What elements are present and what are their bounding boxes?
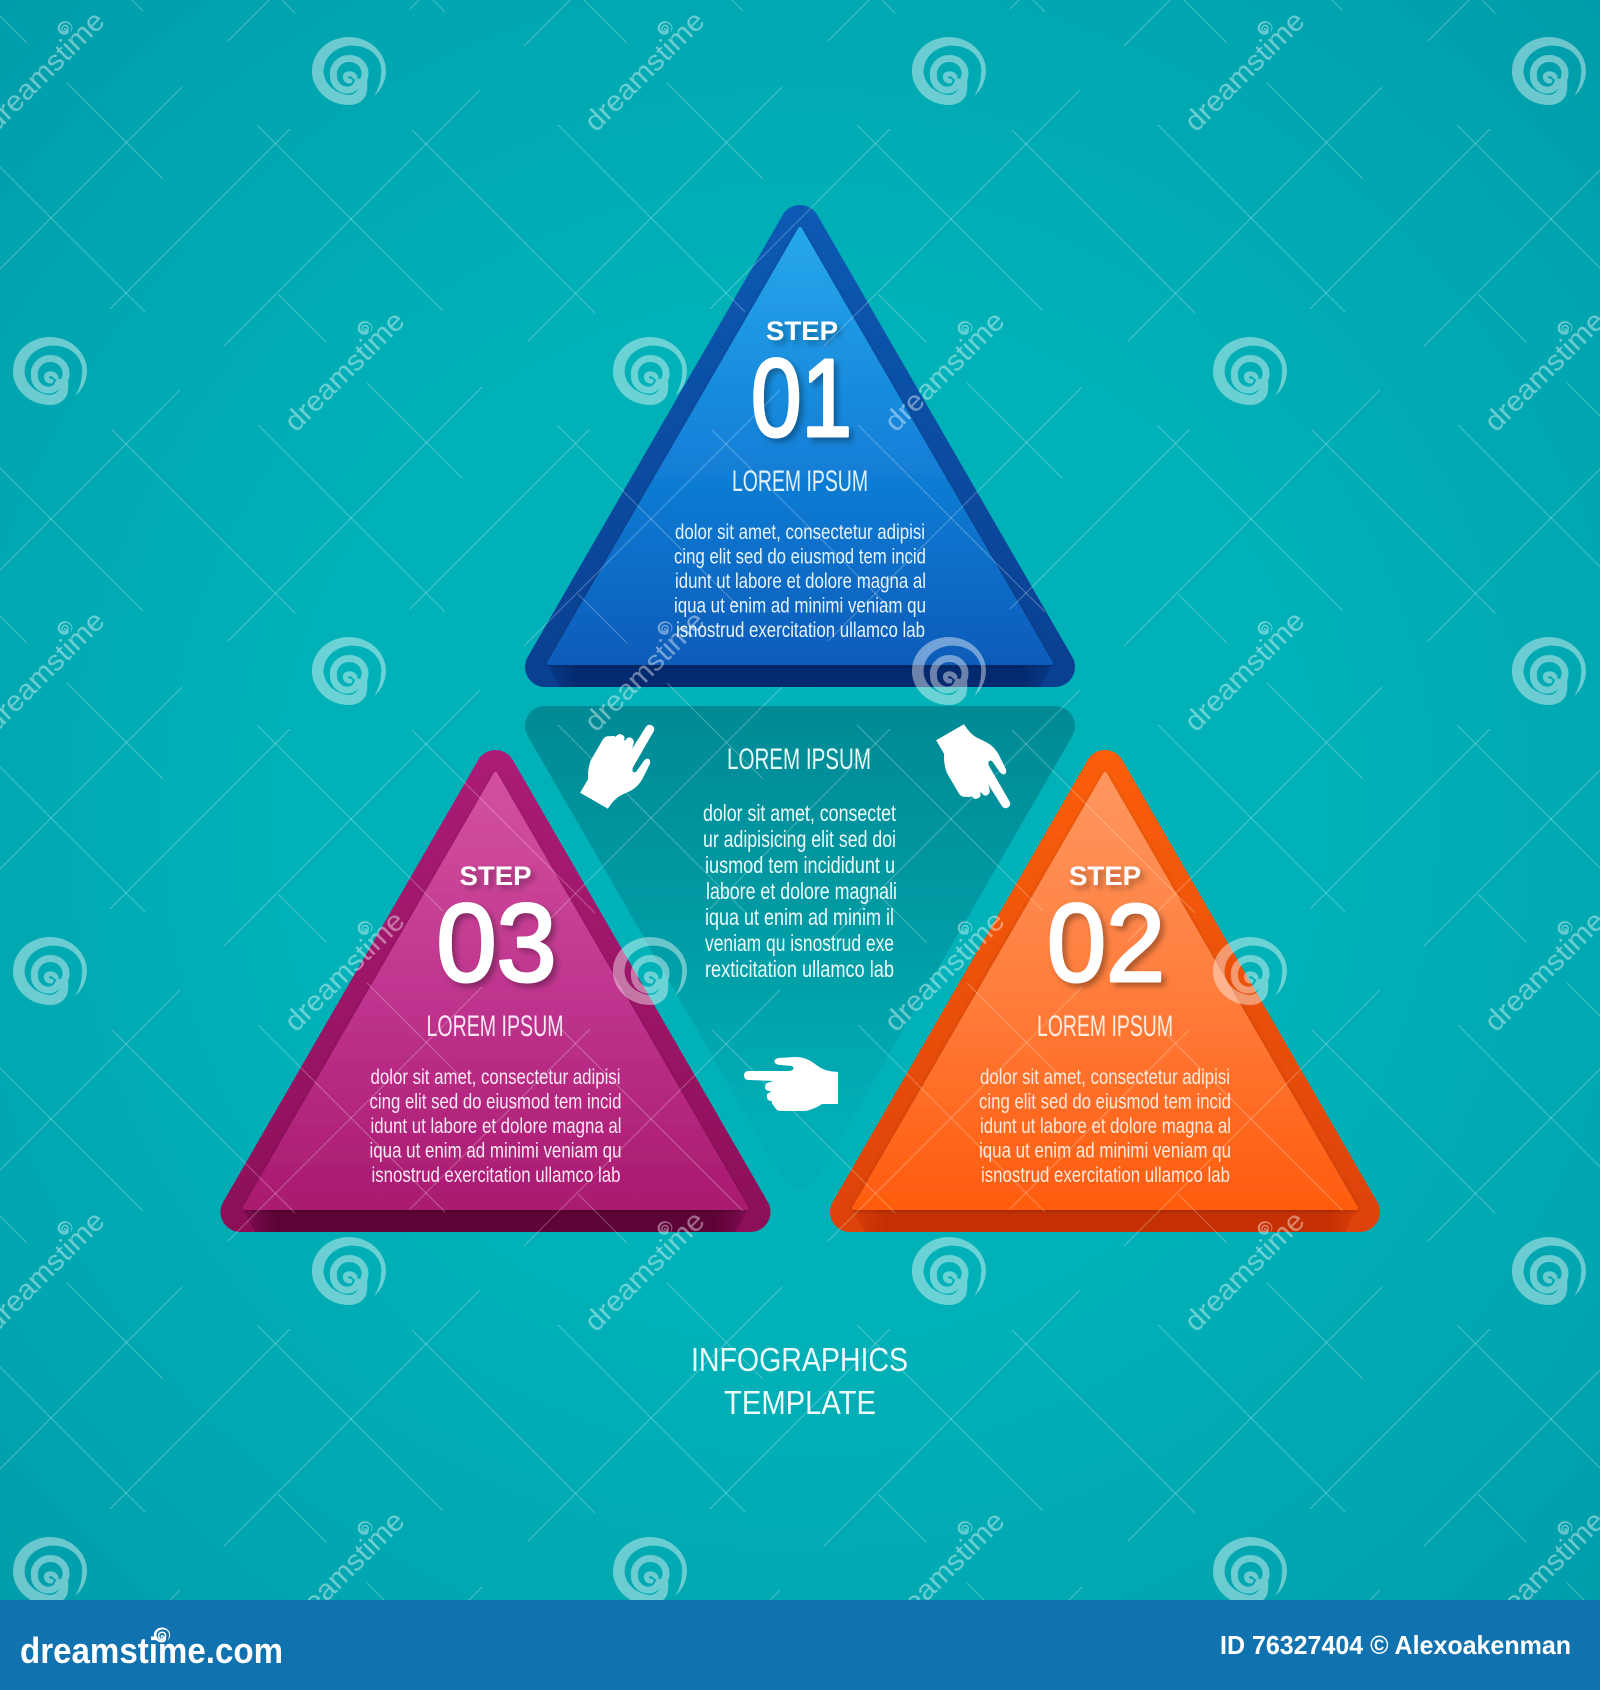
watermark overlay: dreamstime: [1178, 5, 1311, 138]
footer logo text: dreamstime.com: [20, 1630, 283, 1671]
step label: STEP: [766, 316, 838, 346]
body text: dolor sit amet, consectetur adipisi: [980, 1065, 1230, 1089]
panel: step 01 blue triangle: [545, 225, 1055, 687]
panel: step 02 orange triangle: [850, 770, 1360, 1232]
centre body text: [703, 800, 897, 982]
panel: centre inverted triangle: [545, 726, 1055, 1168]
watermark overlay: dreamstime: [578, 5, 711, 138]
title: infographics template: TEMPLATE: [724, 1384, 876, 1421]
centre body text: dolor sit amet, consectet: [703, 800, 896, 826]
body text: iqua ut enim ad minimi veniam qu: [370, 1138, 622, 1162]
panel: step 03 purple triangle: [240, 770, 750, 1232]
watermark overlay: dreamstime: [878, 305, 1011, 438]
title: infographics template: [691, 1341, 908, 1421]
step label: STEP: [1069, 861, 1141, 891]
body text: cing elit sed do eiusmod tem incid: [979, 1090, 1231, 1114]
heading: LOREM IPSUM: [1037, 1010, 1173, 1043]
footer image id: ID 76327404 © Alexoakenman: [1220, 1630, 1571, 1660]
watermark overlay: dreamstime: [878, 1505, 1011, 1638]
body text: idunt ut labore et dolore magna al: [370, 1114, 622, 1138]
heading: LOREM IPSUM: [732, 465, 868, 498]
step number: 03: [436, 882, 556, 1005]
watermark overlay: dreamstime: [1178, 1205, 1311, 1338]
watermark overlay: dreamstime: [278, 305, 411, 438]
icon: pointing hand, bottom: [744, 1057, 838, 1111]
step number: 02: [1047, 882, 1165, 1005]
body text: iqua ut enim ad minimi veniam qu: [979, 1138, 1231, 1162]
title: infographics template: INFOGRAPHICS: [691, 1341, 908, 1378]
body text: idunt ut labore et dolore magna al: [980, 1114, 1231, 1138]
body text: isnostrud exercitation ullamco lab: [676, 618, 925, 642]
icon: pointing hand, top right: [930, 717, 1024, 825]
body text: [979, 1065, 1231, 1187]
watermark overlay: dreamstime: [878, 905, 1011, 1038]
body text: [674, 520, 926, 642]
body text: dolor sit amet, consectetur adipisi: [370, 1065, 620, 1089]
centre body text: iqua ut enim ad minim il: [705, 904, 894, 930]
watermark overlay: dreamstime: [578, 1205, 711, 1338]
footer bar: [0, 1600, 1600, 1690]
centre heading: LOREM IPSUM: [727, 743, 871, 776]
body text: cing elit sed do eiusmod tem incid: [370, 1090, 622, 1114]
watermark overlay: dreamstime: [1178, 605, 1311, 738]
icon: pointing hand, top left: [574, 708, 668, 816]
step label: STEP: [460, 861, 532, 891]
watermark overlay: dreamstime: [278, 905, 411, 1038]
centre body text: ur adipisicing elit sed doi: [703, 826, 896, 852]
centre body text: labore et dolore magnali: [706, 878, 897, 904]
body text: isnostrud exercitation ullamco lab: [981, 1163, 1230, 1187]
body text: [370, 1065, 622, 1187]
centre body text: veniam qu isnostrud exe: [705, 930, 894, 956]
watermark overlay: dreamstime: [578, 605, 711, 738]
body text: dolor sit amet, consectetur adipisi: [675, 520, 925, 544]
body text: cing elit sed do eiusmod tem incid: [674, 544, 926, 568]
centre body text: rexticitation ullamco lab: [705, 956, 894, 982]
body text: idunt ut labore et dolore magna al: [675, 569, 926, 593]
step number: 01: [751, 337, 852, 460]
body text: iqua ut enim ad minimi veniam qu: [674, 594, 926, 618]
icon: footer logo spiral: [154, 1628, 170, 1642]
heading: LOREM IPSUM: [426, 1010, 564, 1043]
watermark overlay: dreamstime: [278, 1505, 411, 1638]
body text: isnostrud exercitation ullamco lab: [372, 1163, 621, 1187]
centre body text: iusmod tem incididunt u: [705, 852, 895, 878]
